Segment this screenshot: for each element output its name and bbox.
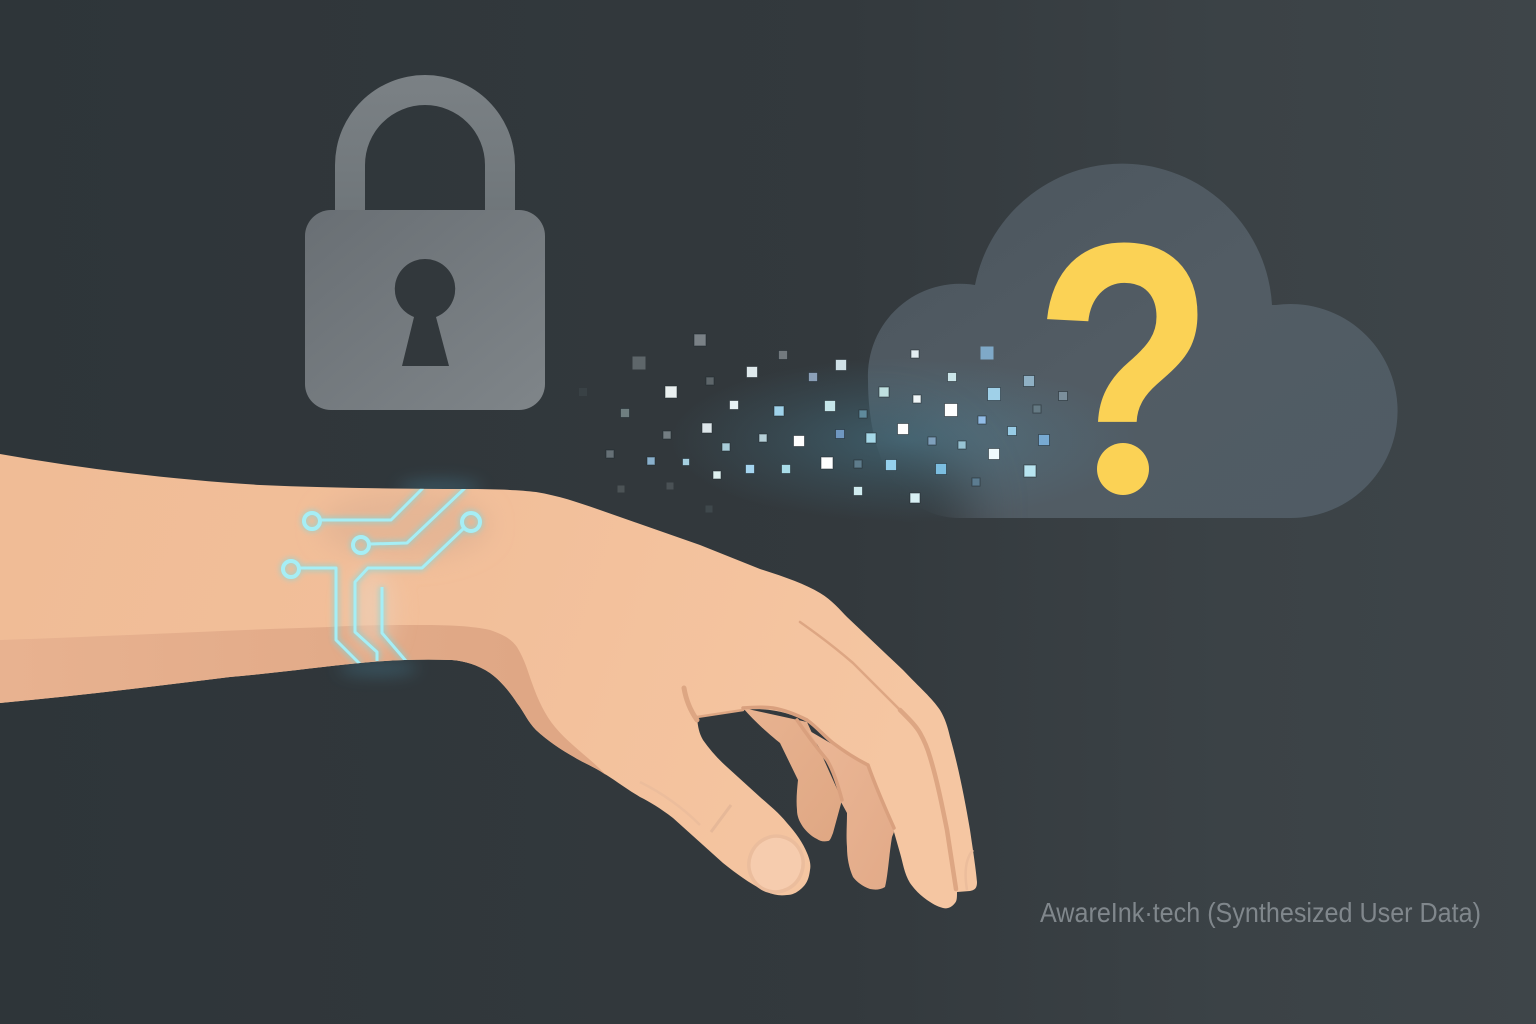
arm and hand silhouette <box>0 454 977 908</box>
knuckle line <box>711 805 731 832</box>
skin tint around tattoo <box>331 488 474 654</box>
tattoo glow <box>283 488 480 664</box>
thumb underside crease <box>640 782 700 825</box>
question mark <box>1047 242 1198 495</box>
thumb nail <box>741 828 811 900</box>
wrist underside shadow <box>0 625 606 775</box>
icon: cloud <box>868 164 1398 518</box>
circuit tattoo <box>283 488 490 664</box>
caption: AwareInk·tech (Synthesized User Data) <box>1040 897 1481 928</box>
question mark: ? <box>1033 167 1215 576</box>
far fingers <box>743 708 894 890</box>
finger creases <box>684 622 956 889</box>
fingertip arc <box>966 850 973 890</box>
data particles <box>579 334 1068 512</box>
tattoo edge glow <box>338 480 482 676</box>
icon: padlock <box>305 75 545 410</box>
data glow <box>670 358 1140 522</box>
keyhole <box>395 259 455 366</box>
hand and forearm <box>0 454 977 908</box>
tattoo lines <box>283 488 480 664</box>
